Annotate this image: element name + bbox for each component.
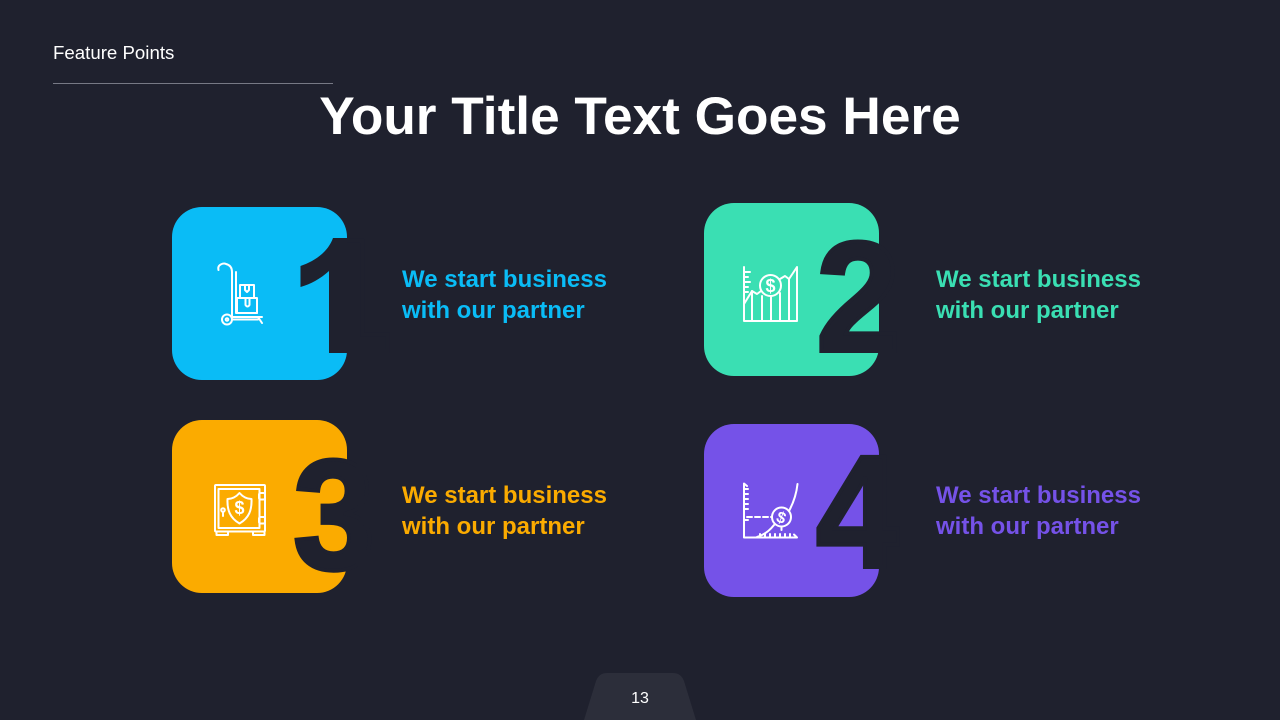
panel: item 3: [172, 420, 607, 603]
panel: item 4: [704, 422, 1141, 601]
card 1: [172, 207, 347, 380]
card 4: [704, 424, 879, 597]
numeral 1: 1: [303, 206, 392, 385]
numeral 4: 4: [816, 422, 899, 601]
text: item 2: with our partner: [935, 297, 1119, 324]
page number tab: 13: [631, 690, 649, 707]
dollar sign 4: $: [774, 509, 788, 528]
dollar sign 3: $: [234, 498, 245, 518]
card 2: [704, 203, 879, 376]
text: item 4: We start business: [936, 482, 1141, 509]
page number tab: [584, 673, 696, 720]
panel: item 2: [704, 203, 1141, 385]
card 3: [172, 420, 347, 593]
text: item 1: with our partner: [401, 297, 585, 324]
text: item 3: We start business: [402, 482, 607, 509]
numeral 2: 2: [816, 209, 901, 385]
text: item 1: We start business: [402, 266, 607, 293]
panel: item 1: [172, 206, 607, 385]
section label: Feature Points: [53, 42, 174, 63]
text: item 3: with our partner: [401, 513, 585, 540]
icon: safe with shield: [215, 485, 265, 535]
title: Your Title Text Goes Here: [319, 87, 961, 146]
dollar sign 2: $: [765, 276, 776, 296]
icon: curve chart with dollar: [744, 484, 798, 538]
numeral 3: 3: [293, 428, 375, 603]
text: item 4: with our partner: [935, 513, 1119, 540]
icon: growth chart with dollar: [744, 267, 797, 321]
text: item 2: We start business: [936, 266, 1141, 293]
icon: hand truck with boxes: [218, 264, 262, 324]
